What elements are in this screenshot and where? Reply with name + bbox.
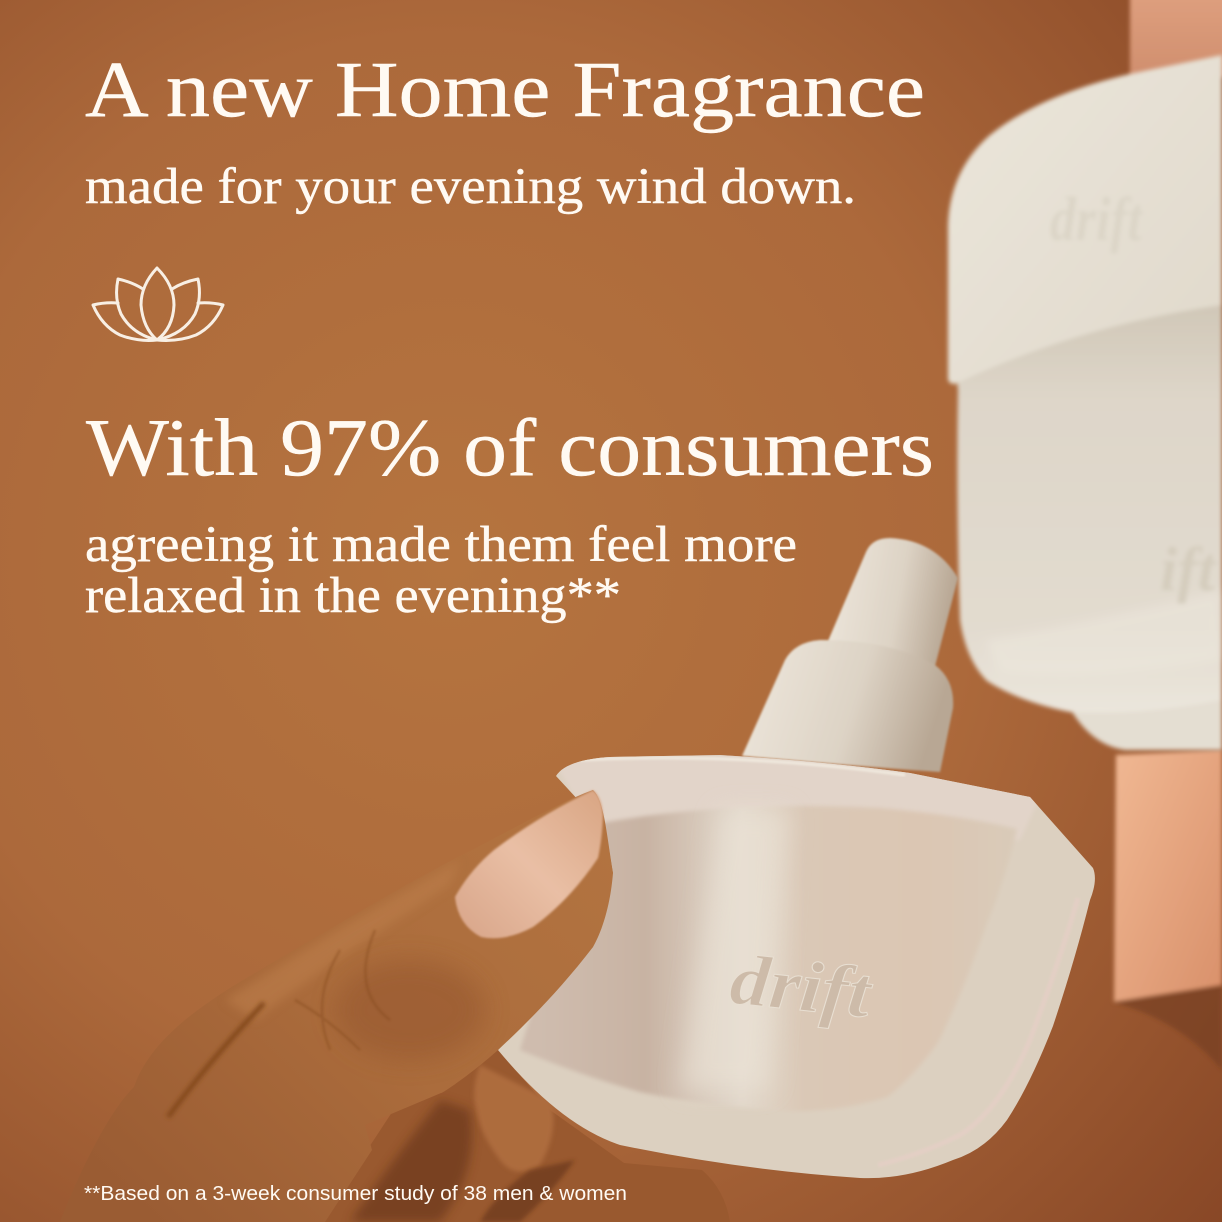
diffuser cap — [948, 55, 1222, 384]
skin wrinkles — [295, 930, 390, 1050]
fragrance refill bottle — [498, 755, 1095, 1178]
hand: lower fingers behind bottle — [320, 1050, 730, 1222]
subheading: evening wind down: made for your evening wind down. — [85, 159, 856, 215]
body text: relaxed in the evening: agreeing it made them feel more — [85, 517, 797, 573]
fingernail — [455, 790, 603, 938]
body text: relaxed in the evening: relaxed in the evening** — [85, 568, 621, 624]
diffuser device — [948, 55, 1222, 750]
diffuser embossed logos: drift — [1050, 186, 1143, 254]
knuckle shadow — [335, 960, 485, 1060]
bottle light column — [680, 810, 790, 1090]
footnote: **Based on a 3-week consumer study of 38 men & women — [84, 1183, 627, 1205]
nozzle shoulder — [742, 640, 953, 772]
body text: relaxed in the evening — [85, 517, 797, 624]
nozzle tube — [828, 538, 958, 680]
bottle embossed logo: drift — [727, 939, 876, 1033]
diffuser device: ift — [1160, 536, 1217, 604]
finger crease — [168, 1003, 264, 1117]
diffuser base ring — [1068, 660, 1222, 750]
hand holding bottle — [164, 789, 613, 1222]
icon: lotus flower — [93, 268, 223, 340]
diffuser jar — [956, 295, 1222, 713]
bottle top band — [550, 755, 1040, 840]
bottle groove — [878, 898, 1078, 1165]
heading: a new home fragrance: A new Home Fragrance — [85, 47, 925, 134]
bottle inner panel — [520, 806, 1017, 1111]
knuckle highlight — [234, 886, 432, 1012]
nozzle — [742, 538, 958, 772]
heading: 97% of consumers: With 97% of consumers — [86, 402, 934, 493]
bottle top rim highlight — [580, 758, 905, 775]
wall outlet plate — [1112, 0, 1222, 1070]
bottle body — [498, 755, 1095, 1178]
